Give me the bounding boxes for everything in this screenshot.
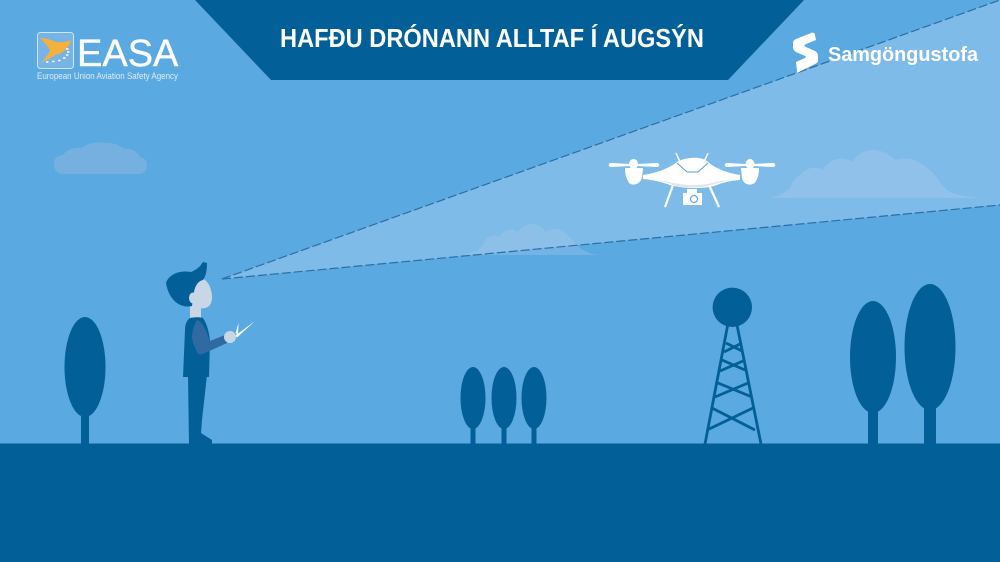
arm [192,320,227,354]
cloud part inside the cone [464,224,576,255]
ear [189,292,197,304]
Samgongustofa logo [793,33,979,73]
bird [40,38,71,62]
canopy line [677,163,708,172]
cone fill [222,0,1000,279]
drone body [643,158,740,188]
cloud: centre [463,224,603,255]
body shadow [650,179,734,188]
EASA logo [37,32,179,82]
trees: centre group [460,367,546,445]
sky background [0,0,1000,444]
wordmark: Samgöngustofa [828,44,979,66]
legs [188,375,212,444]
right rotor [725,163,775,167]
motor pods [625,168,643,185]
drone [609,153,775,207]
trees: right pair [850,284,956,445]
tree: left [64,317,106,445]
stars [46,49,70,62]
antennae [676,153,708,162]
cone dashed edges [222,0,1000,279]
person [166,262,255,444]
neck [190,303,201,320]
EASA wordmark: EASA [77,33,179,75]
left rotor [609,163,659,167]
title banner [195,0,804,80]
torso [183,317,210,377]
S icon [793,33,818,73]
radio tower [705,288,761,444]
camera [683,189,702,205]
cloud: right [770,150,982,198]
cloud: left [54,142,147,174]
landing legs [665,185,719,207]
sight cone [222,0,1000,279]
EASA tagline: European Union Aviation Safety Agency [37,71,178,82]
hand [224,331,236,343]
hair [166,262,207,307]
face [192,278,212,308]
ground [0,444,1000,562]
controller [236,321,255,338]
logo emblem [38,32,74,68]
title: HAFÐU DRÓNANN ALLTAF Í AUGSÝN [280,23,704,53]
